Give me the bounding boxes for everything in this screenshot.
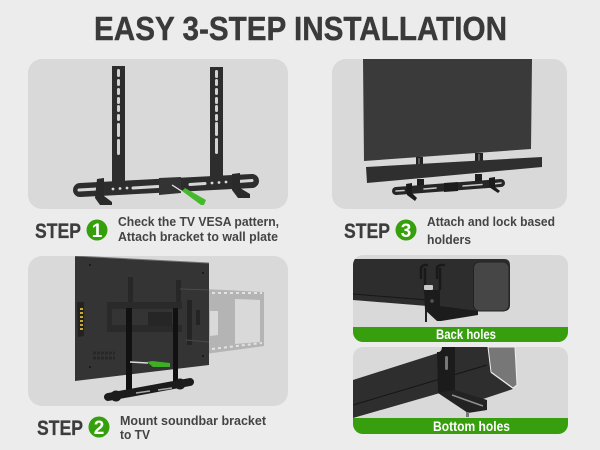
- step 1 description: Attach bracket to wall plate: [118, 229, 278, 244]
- icon: TV back with mount: [75, 256, 209, 381]
- step 3 description: [427, 214, 555, 247]
- step 2 description: Mount soundbar bracket: [120, 413, 267, 428]
- panel: bottom holes: [353, 347, 568, 434]
- icon: number 2 badge: [88, 416, 110, 439]
- label: back holes: Back holes: [436, 327, 496, 342]
- step 2 description: [120, 413, 267, 442]
- icon: ghost wall plate: [209, 289, 264, 354]
- step 3 label: [344, 214, 555, 247]
- step 1 label: [35, 214, 279, 244]
- icon: TV: [363, 59, 532, 161]
- green label bar: [353, 327, 568, 342]
- icon: number 3 badge: 3: [401, 221, 411, 242]
- icon: number 2 badge: 2: [94, 418, 104, 439]
- green label bar: [353, 418, 568, 434]
- panel: step 2 image: [28, 256, 288, 406]
- icon: bracket on TV: [108, 308, 190, 402]
- step 2 label: [37, 413, 267, 442]
- title: EASY 3-STEP INSTALLATION: [94, 10, 507, 47]
- step 1 description: Check the TV VESA pattern,: [118, 214, 279, 229]
- icon: soundbar bottom view: [353, 347, 517, 418]
- panel: back holes: [353, 255, 568, 342]
- icon: soundbar and bracket: [366, 153, 542, 201]
- panel: step 1 image: [28, 59, 288, 209]
- icon: number 3 badge: [396, 220, 416, 242]
- step 1 label: STEP: [35, 219, 81, 243]
- step 2 label: STEP: [37, 416, 83, 440]
- step 1 description: [118, 214, 279, 244]
- step 3 description: holders: [427, 232, 471, 247]
- label: bottom holes: Bottom holes: [433, 419, 510, 434]
- step 3 description: Attach and lock based: [427, 214, 555, 229]
- step 2 description: to TV: [120, 427, 150, 442]
- panel: step 3 image: [332, 59, 567, 209]
- icon: soundbar bracket with arms: [79, 66, 252, 205]
- icon: screwdriver: [130, 361, 170, 367]
- icon: soundbar back view: [353, 259, 510, 322]
- icon: number 1 badge: [86, 220, 108, 242]
- icon: number 1 badge: 1: [92, 221, 103, 242]
- step 3 label: STEP: [344, 219, 390, 243]
